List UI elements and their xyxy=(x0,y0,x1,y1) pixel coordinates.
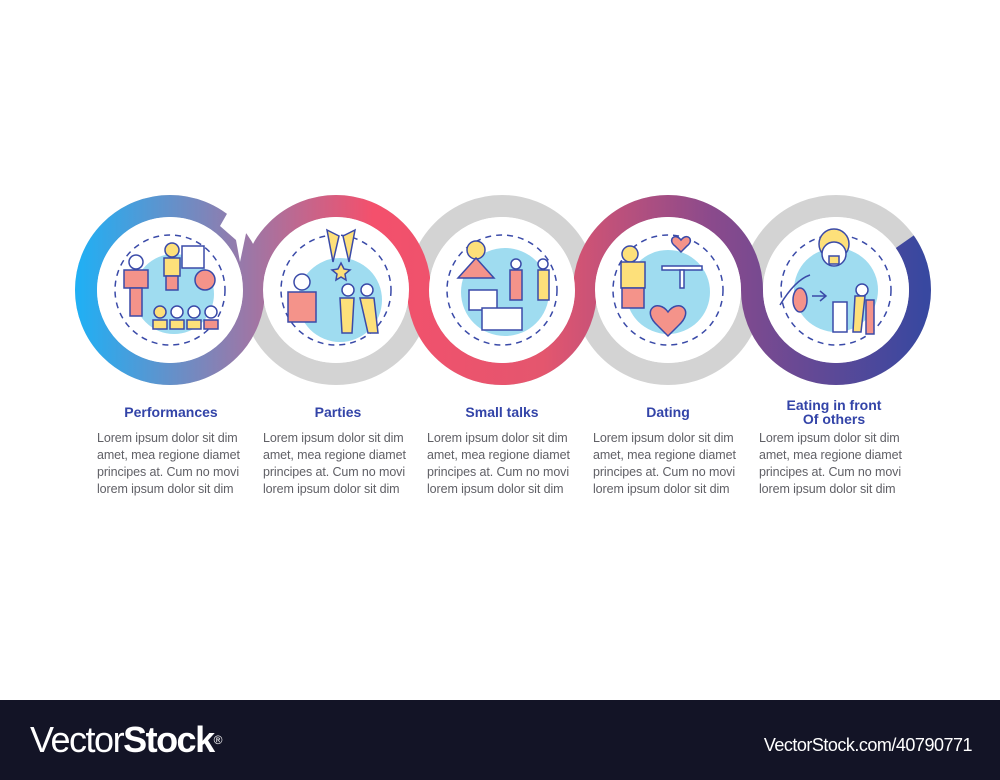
column: Performances: amet, mea regione diamet xyxy=(97,448,240,462)
diagram: snake rings xyxy=(75,195,931,385)
column: Eating in front of others: lorem ipsum dolor sit dim xyxy=(759,482,895,496)
column: Eating in front of others: Of others xyxy=(803,411,865,427)
column: Performances: principes at. Cum no movi xyxy=(97,465,239,479)
column: Parties: principes at. Cum no movi xyxy=(263,465,405,479)
column: Dating: Dating xyxy=(646,404,690,420)
column: Parties: amet, mea regione diamet xyxy=(263,448,406,462)
column: Parties: Lorem ipsum dolor sit dim xyxy=(263,431,404,445)
column: Eating in front of others: principes at. Cum no movi xyxy=(759,465,901,479)
column: Eating in front of others: amet, mea regione diamet xyxy=(759,448,902,462)
column: Small talks: amet, mea regione diamet xyxy=(427,448,570,462)
icon: performances xyxy=(115,235,225,345)
column: Small talks xyxy=(427,404,570,496)
footer logo: VectorStock® xyxy=(30,719,221,760)
footer xyxy=(0,700,1000,780)
column: Eating in front of others xyxy=(759,397,902,496)
column: Eating in front of others: Lorem ipsum dolor sit dim xyxy=(759,431,900,445)
column: Parties: Parties xyxy=(315,404,361,420)
column: Dating: Lorem ipsum dolor sit dim xyxy=(593,431,734,445)
icon: dating xyxy=(613,235,723,345)
column: Eating in front of others: Eating in front xyxy=(787,397,881,413)
column: Performances: Lorem ipsum dolor sit dim xyxy=(97,431,238,445)
column: Small talks: Lorem ipsum dolor sit dim xyxy=(427,431,568,445)
column: Dating: amet, mea regione diamet xyxy=(593,448,736,462)
gradient band xyxy=(86,206,920,374)
column: Parties xyxy=(263,404,406,496)
column: Performances: Performances xyxy=(124,404,218,420)
icon: small talks xyxy=(447,235,557,345)
icon: eating xyxy=(780,229,891,345)
column: Small talks: lorem ipsum dolor sit dim xyxy=(427,482,563,496)
column: Dating: lorem ipsum dolor sit dim xyxy=(593,482,729,496)
footer url: VectorStock.com/40790771 xyxy=(764,735,972,755)
column: Dating xyxy=(593,404,736,496)
column: Parties: lorem ipsum dolor sit dim xyxy=(263,482,399,496)
column: Performances: lorem ipsum dolor sit dim xyxy=(97,482,233,496)
column: Small talks: Small talks xyxy=(465,404,539,420)
column: Performances xyxy=(97,404,240,496)
column: Small talks: principes at. Cum no movi xyxy=(427,465,569,479)
icon: parties xyxy=(281,230,391,345)
column: Dating: principes at. Cum no movi xyxy=(593,465,735,479)
arrow tail notch xyxy=(220,212,248,262)
